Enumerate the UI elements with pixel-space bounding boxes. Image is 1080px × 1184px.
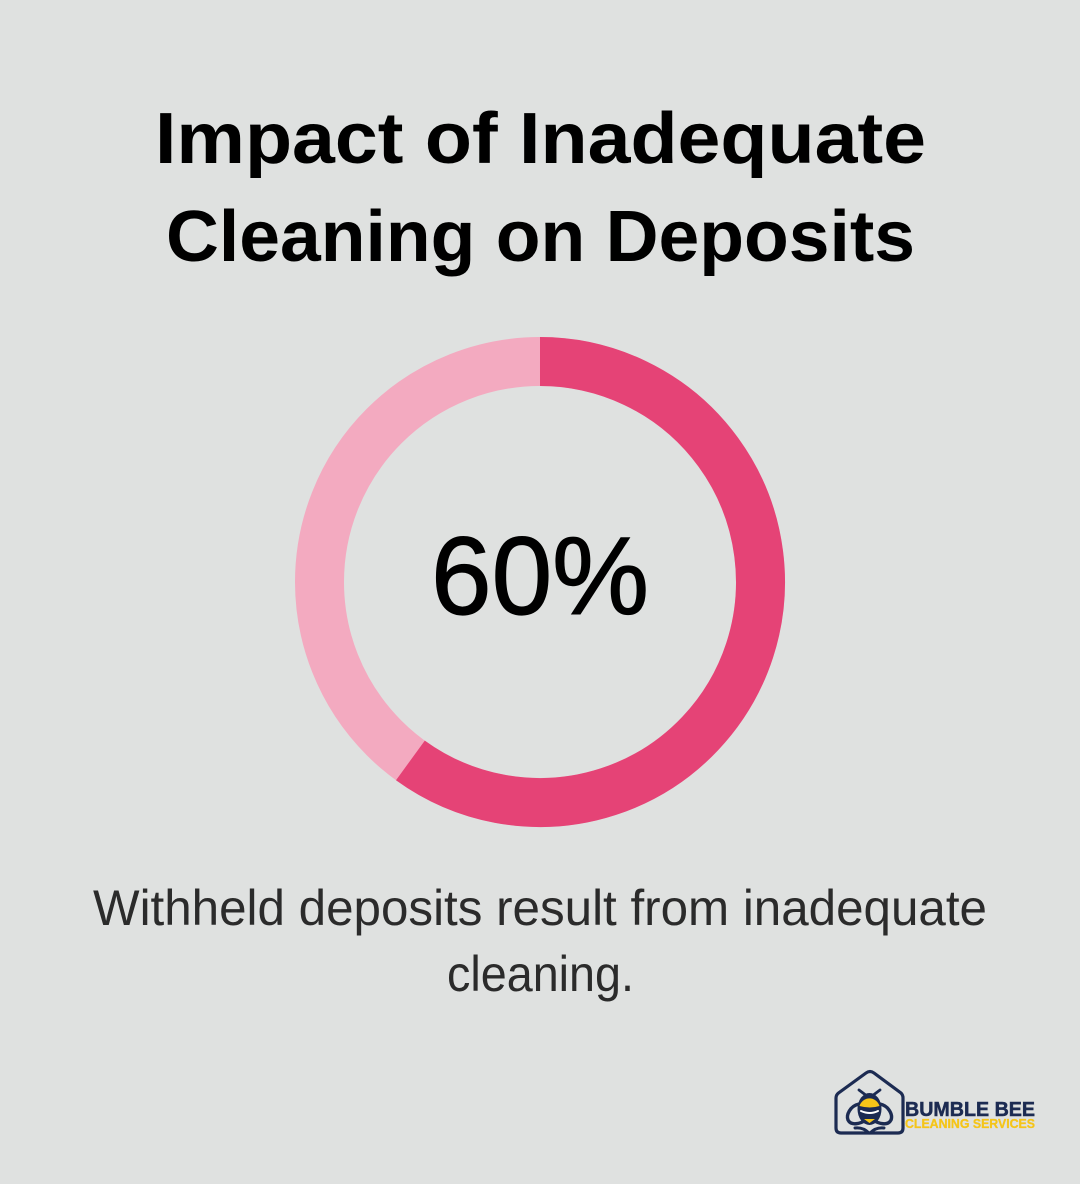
title (155, 99, 926, 277)
donut value: 60% (431, 515, 649, 638)
title: Impact of Inadequate (155, 99, 926, 179)
logo name: BUMBLE BEE (905, 1099, 1035, 1121)
description: Withheld deposits result from inadequate (93, 880, 987, 936)
description (93, 880, 987, 1002)
title: Cleaning on Deposits (166, 197, 915, 277)
logo tagline: CLEANING SERVICES (905, 1117, 1035, 1131)
logo: Bumble Bee Cleaning Services (836, 1072, 1035, 1133)
donut chart: 60% (320, 362, 760, 802)
icon: house with bee (836, 1072, 903, 1133)
description: cleaning. (447, 946, 634, 1002)
